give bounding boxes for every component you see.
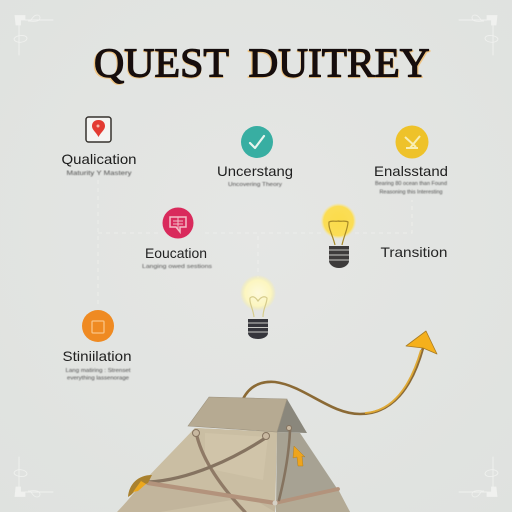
title: DUITREY [247, 40, 431, 86]
caption: Bearing 80 ocean than Found [375, 181, 447, 187]
corner ornament: top right [459, 15, 498, 55]
step: Eoucation [142, 208, 212, 270]
caption: Reasoning this Interesting [380, 190, 442, 196]
caption: Lang matiring : Strenset [66, 368, 131, 374]
caption: Maturity Y Mastery [66, 171, 132, 177]
corner ornament: top left [14, 15, 53, 55]
title: QUEST [92, 40, 230, 86]
caption [375, 181, 447, 196]
tent / pyramid illustration [117, 397, 350, 512]
heading: Enalsstand [374, 163, 448, 179]
title [92, 40, 431, 86]
title: QUEST [94, 40, 229, 86]
dashed connector lines [98, 180, 412, 305]
roof side [277, 399, 307, 433]
caption: Langing owed sestions [142, 264, 212, 270]
icon: teal check badge [241, 126, 273, 158]
icon: pale glowing bulb [240, 275, 276, 339]
heading: Transition [380, 244, 448, 260]
small orange arrow [293, 446, 305, 466]
roof front [188, 397, 287, 432]
caption: everything lassenorage [67, 376, 129, 382]
title: DUITREY [248, 40, 430, 86]
icon: yellow tools badge [396, 126, 428, 158]
icon: lit yellow bulb [320, 203, 356, 268]
icon: orange square badge [82, 310, 114, 342]
heading: Uncerstang [217, 163, 293, 179]
heading: Eoucation [145, 245, 207, 261]
heading: Stiniilation [62, 348, 132, 364]
tent right face [276, 432, 350, 512]
heading: Qualication [62, 151, 136, 167]
caption: Uncovering Theory [228, 182, 282, 188]
step: Qualication [62, 117, 136, 177]
icon: red balloon pin [86, 117, 111, 142]
corner ornament: bottom left [14, 457, 53, 497]
golden buckle [128, 475, 152, 497]
curved arrow [243, 331, 437, 414]
step: Stimilation [62, 310, 132, 382]
step: Transition with yellow light bulb [320, 203, 448, 268]
icon: pink book badge [162, 208, 194, 238]
caption [66, 368, 131, 382]
step: Enalsstand [374, 126, 448, 196]
strap rings [192, 430, 200, 436]
step: Understang [217, 126, 293, 188]
tent left front face [117, 428, 277, 512]
straps [148, 430, 338, 512]
corner ornament: bottom right [459, 457, 498, 497]
